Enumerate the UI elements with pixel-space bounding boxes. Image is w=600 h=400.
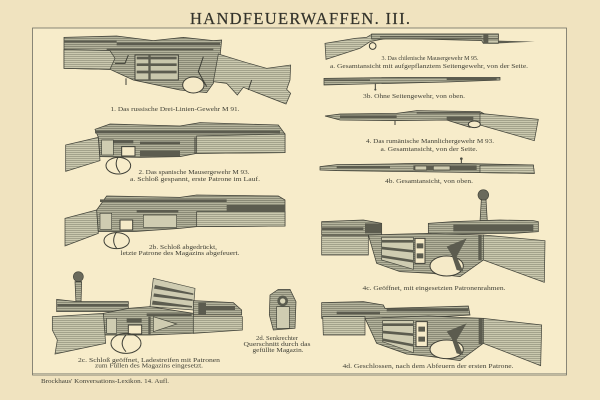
caption 3b: 3b. Ohne Seitengewehr, von oben. (363, 94, 466, 100)
caption 2d: Querschnitt durch das (244, 342, 311, 348)
plate frame (32, 28, 567, 375)
footer credit: Brockhaus' Konversations-Lexikon. 14. Aufl. (41, 378, 170, 385)
caption 2c (78, 357, 220, 370)
caption 2c: 2c. Schloß geöffnet, Ladestreifen mit Patronen (78, 357, 220, 364)
rifle 2: Spanish Mauser M93 (66, 123, 285, 174)
caption 3 (330, 56, 529, 70)
caption 2c: zum Füllen des Magazins eingesetzt. (95, 364, 204, 370)
caption 2: 2. Das spanische Mausergewehr M 93. (138, 170, 250, 176)
caption 2d (244, 336, 311, 354)
caption 2b (120, 244, 240, 257)
caption 2b: letzte Patrone des Magazins abgefeuert. (120, 250, 240, 257)
caption 4: 4. Das rumänische Mannlichergewehr M 93. (366, 139, 495, 145)
magazine cross-section 2d (269, 289, 296, 330)
caption 2: a. Schloß gespannt, erste Patrone im Lauf. (130, 176, 261, 183)
caption 4b: 4b. Gesamtansicht, von oben. (385, 179, 474, 185)
title: HANDFEUERWAFFEN. III. (190, 9, 410, 28)
rifle 2c: bolt open with charger clip (52, 272, 242, 354)
rifle 4: Romanian Mannlicher M93 side view (325, 111, 538, 141)
caption 3: a. Gesamtansicht mit aufgepflanztem Seitengewehr, von der Seite. (330, 63, 529, 70)
caption 1: 1. Das russische Drei-Linien-Gewehr M 91. (110, 107, 240, 113)
caption 4c: 4c. Geöffnet, mit eingesetzten Patronenrahmen. (362, 285, 506, 292)
caption 4: a. Gesamtansicht, von der Seite. (380, 147, 478, 153)
rifle 4b: top view (320, 157, 534, 173)
rifle 4d: closed after first shot (322, 302, 542, 366)
caption 2d: gefüllte Magazin. (252, 347, 304, 354)
caption 2d: 2d. Senkrechter (256, 336, 298, 342)
caption 2 (130, 170, 261, 183)
caption 2b: 2b. Schloß abgedrückt, (149, 244, 218, 251)
rifle 1: Russian Drei-Linien M91 cutaway (64, 36, 291, 104)
rifle 2b: bolt released (65, 195, 285, 249)
caption 4d: 4d. Geschlossen, nach dem Abfeuern der ersten Patrone. (342, 363, 514, 370)
rifle 3: Chilean Mauser M95 side view with bayonet (325, 34, 535, 59)
caption 3: 3. Das chilenische Mausergewehr M 95. (382, 56, 479, 62)
caption 4 (366, 139, 495, 153)
rifle 4c: action open with cartridge frame (322, 190, 545, 282)
rifle 3b: top view without bayonet (324, 77, 500, 91)
